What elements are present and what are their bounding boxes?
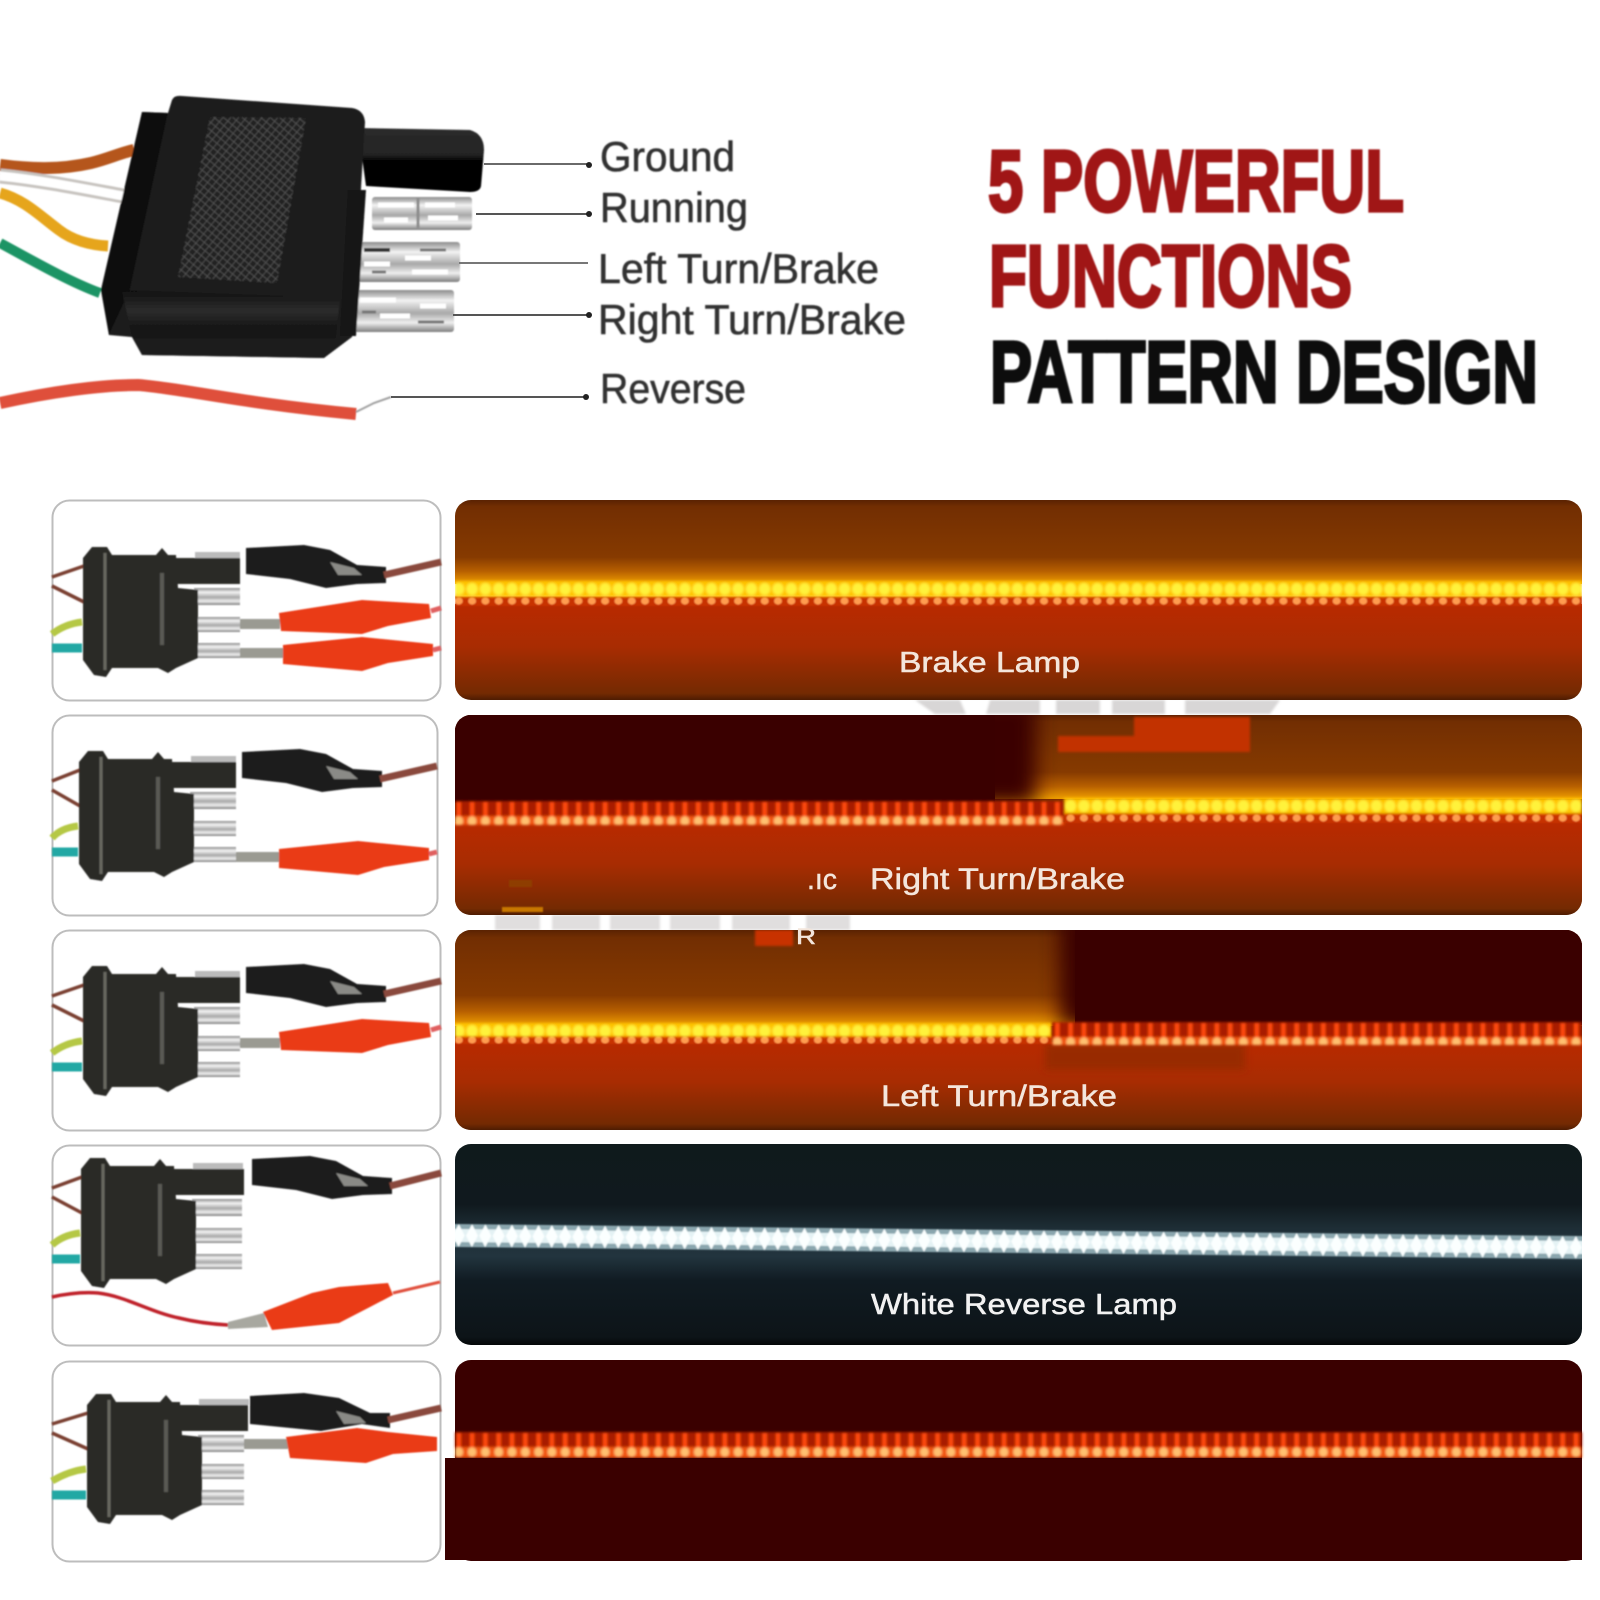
title line 1: 5 POWERFUL: [988, 133, 1404, 230]
connector with clips: [52, 1156, 441, 1330]
title: [988, 133, 1538, 421]
label: brake lamp: Brake Lamp: [899, 647, 1080, 679]
base fill: [455, 715, 1582, 915]
red led row right: [1052, 1022, 1582, 1045]
wire: running white: [0, 176, 123, 196]
wire: right turn green: [0, 243, 100, 293]
darker patch under strip: [1045, 1044, 1245, 1070]
connector with clips: [52, 545, 441, 677]
panel: left turn strip: [455, 915, 1600, 1130]
red led row left: [455, 801, 1064, 825]
panel: right turn strip: [440, 700, 1582, 915]
dark background: [455, 1360, 1582, 1561]
connector wiring diagram: [0, 96, 484, 414]
connector with clip: [52, 964, 441, 1096]
connector with clips: [52, 1393, 441, 1524]
label leader lines: [391, 162, 592, 400]
amber upper glow: [455, 500, 1582, 584]
panel: brake lamp strip: [455, 500, 1582, 700]
pin: running: [372, 197, 472, 230]
artefact orange dashes: [502, 880, 543, 912]
wire: left turn yellow: [0, 193, 108, 246]
yellow led row right: [1064, 798, 1582, 814]
dark unlit upper right: [1046, 930, 1582, 1032]
dark overlay block: [445, 1458, 1582, 1560]
connector arm: [358, 128, 484, 192]
artefact red block: [1058, 717, 1250, 752]
yellow led row: [455, 581, 1582, 597]
red led row: [455, 1432, 1582, 1458]
panel frame: [52, 930, 440, 1130]
dark background: [455, 1144, 1582, 1345]
watermark remnants between bars: [495, 700, 1280, 930]
connector lower band: [122, 290, 340, 358]
white led row: [450, 1224, 1590, 1259]
panel: brake lamp wiring: [52, 500, 441, 700]
label: ground: Ground: [600, 133, 735, 180]
dark unlit upper left: [440, 700, 1036, 805]
artefact red block: [755, 930, 793, 946]
connector side flange: [101, 112, 168, 335]
amber upper glow: [455, 715, 1582, 799]
label: reverse: Reverse: [600, 365, 746, 412]
red lower body: [455, 822, 1582, 915]
panel frame: [52, 1362, 440, 1562]
peach led row left: [455, 1035, 1052, 1044]
label: left turn/brake: [796, 924, 1117, 1113]
panel: left turn wiring: [52, 930, 441, 1130]
peach led row: [455, 596, 1582, 606]
label: left turn/brake: R: [796, 924, 816, 949]
label: left turn/brake: Left Turn/Brake: [881, 1080, 1117, 1113]
panel frame: [52, 1146, 440, 1346]
wire: ground brown: [0, 150, 134, 168]
label: left turn/brake: Left Turn/Brake: [598, 245, 879, 292]
amber upper glow: [455, 930, 1582, 1026]
peach led row right: [1064, 813, 1582, 823]
panel: running wiring: [52, 1362, 441, 1562]
label: right turn/brake: Right Turn/Brake: [870, 863, 1125, 896]
panel: reverse strip: [450, 1144, 1590, 1345]
wire: reverse bare tip: [356, 397, 391, 412]
red lower body: [455, 604, 1582, 700]
label: white reverse lamp: White Reverse Lamp: [871, 1289, 1177, 1321]
base fill: [455, 930, 1582, 1130]
connector labels: [598, 133, 906, 412]
panel frame: [52, 716, 438, 916]
label: running: Running: [600, 184, 748, 231]
label: right turn/brake: .ıc: [807, 864, 837, 896]
connector mesh grip: [178, 117, 306, 283]
connector body: [101, 96, 365, 358]
wire: reverse red: [0, 385, 356, 414]
pin: right turn: [354, 290, 454, 332]
panel: running strip: [445, 1360, 1582, 1561]
title line 2: FUNCTIONS: [989, 228, 1352, 325]
connector side teeth: [340, 190, 366, 336]
panel: reverse wiring: [52, 1146, 441, 1346]
pin: left turn: [358, 242, 460, 282]
red lower body: [455, 1042, 1582, 1130]
panel: right turn wiring: [52, 716, 438, 916]
yellow led row left: [455, 1023, 1052, 1037]
panel frame: [52, 500, 440, 700]
label: right turn/brake: Right Turn/Brake: [598, 296, 906, 343]
connector with clip: [52, 749, 437, 881]
